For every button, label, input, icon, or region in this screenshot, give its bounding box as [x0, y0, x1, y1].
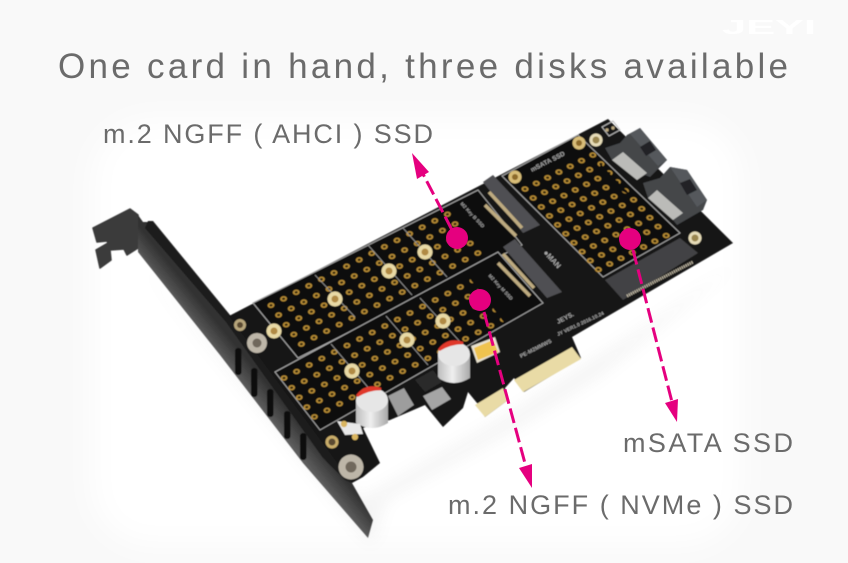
metal bracket	[93, 209, 373, 538]
SATA port lower	[643, 167, 707, 225]
voltage regulator chip	[415, 370, 451, 410]
silkscreen labels	[459, 150, 605, 360]
small solder pads	[337, 421, 363, 440]
product: PCIe adapter card	[93, 119, 733, 538]
SATA port upper	[605, 128, 667, 180]
capacitor left	[356, 388, 388, 428]
silkscreen labels: PE-M2MMWS	[519, 338, 553, 360]
capacitor right	[438, 342, 470, 383]
tantalum capacitor	[471, 337, 500, 363]
jumper header	[602, 121, 620, 136]
mSATA connector	[605, 238, 698, 300]
marker: NVMe slot arrow	[469, 289, 532, 488]
silkscreen labels: M2 Key M SSD	[487, 273, 514, 302]
slot: m.2 AHCI	[253, 190, 522, 358]
mounting holes and screws	[234, 134, 702, 480]
m.2 connector top	[483, 175, 540, 236]
silkscreen labels: M2 Key B SSD	[459, 201, 486, 230]
silkscreen labels: ●MAN	[542, 248, 563, 270]
silkscreen labels: JY VER1.0 2016.10.24	[556, 311, 605, 338]
gold edge connector	[475, 347, 581, 417]
silkscreen labels: JEYS.	[556, 311, 575, 326]
marker: mSATA slot arrow	[619, 228, 678, 422]
title: One card in hand, three disks available	[58, 47, 788, 86]
circuit board	[229, 119, 733, 483]
label: m.2 NVMe: m.2 NGFF ( NVMe ) SSD	[448, 490, 793, 520]
label: mSATA: mSATA SSD	[623, 428, 793, 458]
label: m.2 AHCI: m.2 NGFF ( AHCI ) SSD	[103, 119, 433, 149]
watermark logo: JEYI	[722, 17, 816, 39]
slot: m.2 NVMe	[274, 252, 543, 430]
marker: AHCI slot arrow	[412, 153, 468, 249]
inductor	[388, 388, 414, 416]
card shadow	[140, 262, 740, 545]
silkscreen labels: mSATA SSD	[530, 150, 567, 174]
slot: mSATA	[502, 135, 680, 277]
m.2 connector bottom	[498, 239, 562, 298]
